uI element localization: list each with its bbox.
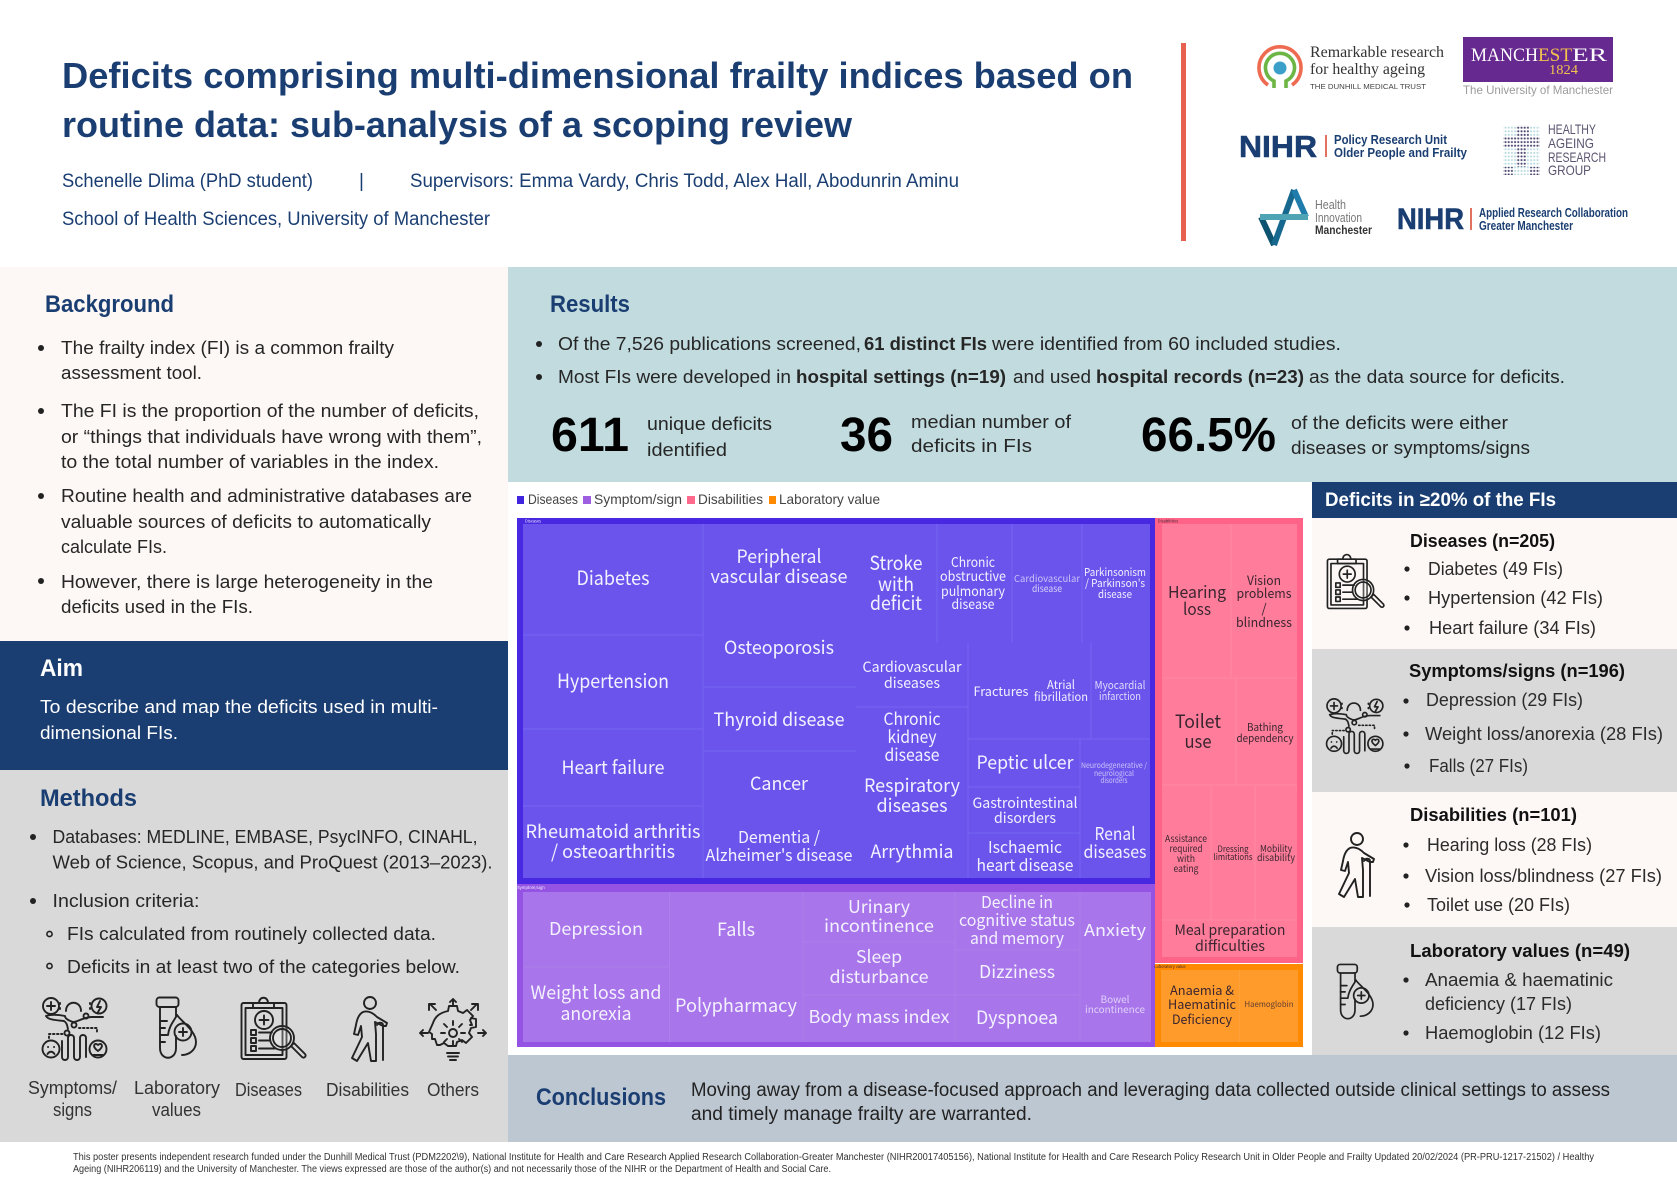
- treemap group: laboratory value: Haematinic: [1168, 994, 1236, 1013]
- treemap group: disabilities: with: [1177, 851, 1195, 865]
- treemap group: symptom/sign: anorexia: [560, 1000, 632, 1026]
- results bullet 1: Of the 7,526 publications screened,: [558, 333, 861, 354]
- treemap group: diseases: Cardiovascular: [1014, 571, 1080, 585]
- stat: 611 unique deficits: 611: [551, 409, 629, 462]
- background bullet points: [38, 337, 482, 617]
- treemap group: symptom/sign: Body mass index: [808, 1004, 950, 1029]
- icon labels: Laboratory: [134, 1077, 221, 1098]
- treemap group: diseases: Atrial: [1047, 676, 1075, 693]
- treemap group: disabilities: Hearing: [1168, 579, 1227, 603]
- logo: Dunhill Medical Trust: [1259, 44, 1444, 91]
- treemap group: diseases: fibrillation: [1034, 688, 1088, 705]
- icon: disabilities: [352, 997, 387, 1061]
- stat: 611 unique deficits: identified: [647, 439, 727, 460]
- treemap group: symptom/sign: Decline in: [981, 889, 1053, 913]
- treemap chart: [517, 518, 1303, 1047]
- heading: conclusions: Conclusions: [536, 1084, 666, 1111]
- category: disabilities: Hearing loss (28 FIs): [1427, 834, 1592, 855]
- category: symptoms/signs: Depression (29 FIs): [1426, 689, 1583, 710]
- category: symptoms/signs: Weight loss/anorexia (28 FIs): [1425, 723, 1663, 744]
- logo: University of Manchester: ER: [1572, 45, 1607, 66]
- footer: funding statement: [73, 1152, 1594, 1175]
- treemap group: diseases: Fractures: [974, 681, 1028, 700]
- treemap group: diseases: disease: [884, 741, 940, 766]
- logo: University of Manchester: 1824: [1549, 63, 1578, 78]
- results bullet 2: hospital records (n=23): [1096, 366, 1304, 387]
- treemap group: disabilities: use: [1184, 728, 1212, 754]
- logo: University of Manchester: The University of Manchester: [1463, 83, 1613, 97]
- treemap group: diseases: / osteoarthritis: [551, 838, 675, 864]
- category: disabilities: Toilet use (20 FIs): [1427, 894, 1570, 915]
- treemap legend: Laboratory value: [779, 491, 880, 507]
- treemap group: diseases: Stroke: [870, 547, 922, 576]
- treemap group: diseases: heart disease: [976, 852, 1074, 876]
- treemap group: diseases: Respiratory: [864, 772, 960, 798]
- category: disabilities: Vision loss/blindness (27 FIs): [1425, 865, 1662, 886]
- logo: NIHR Applied Research Collaboration: Applied Research Collaboration: [1479, 206, 1628, 220]
- conclusions text: [691, 1080, 1610, 1125]
- category: diseases: [1312, 518, 1677, 649]
- treemap group: symptom/sign: Bowel: [1100, 991, 1130, 1006]
- authors: Supervisors: Emma Vardy, Chris Todd, Alex Hall, Abodunrin Aminu: [410, 171, 959, 192]
- treemap group: symptom/sign: and memory: [970, 925, 1064, 949]
- background bullet points: Routine health and administrative databases are: [61, 485, 472, 506]
- treemap group: symptom/sign: Dizziness: [979, 959, 1055, 984]
- background bullet points: assessment tool.: [61, 362, 202, 383]
- treemap group: diseases: diseases: [884, 672, 940, 693]
- treemap group: laboratory value: Haemoglobin: [1244, 999, 1294, 1010]
- treemap group: symptom/sign: incontinence: [1085, 1001, 1145, 1016]
- treemap group: disabilities: Meal preparation: [1174, 919, 1286, 940]
- methods bullet list: [30, 826, 492, 977]
- footer: funding statement: Ageing (NIHR206119) and the University of Manchester. The views expressed are those of the author(s) and not necessarily those of the NIHR or the Department of Health and Social Care.: [73, 1164, 831, 1175]
- background bullet points: or “things that individuals have wrong with them”,: [61, 426, 482, 447]
- icon labels: Symptoms/: [28, 1077, 118, 1098]
- treemap group: disabilities: Mobility: [1260, 841, 1292, 855]
- treemap group: laboratory value: [1154, 964, 1303, 1047]
- treemap group: diseases: Chronic: [884, 705, 941, 730]
- treemap group: diseases: neurological: [1094, 768, 1134, 779]
- treemap group: symptom/sign: Anxiety: [1084, 917, 1146, 941]
- logo: NIHR Policy Research Unit: NIHR: [1239, 129, 1317, 164]
- stat: 66.5% diseases or symptoms: 66.5%: [1141, 409, 1276, 462]
- results bullet 1: were identified from 60 included studies.: [991, 333, 1341, 354]
- results bullet 2: hospital settings (n=19): [796, 366, 1006, 387]
- treemap group: laboratory value: Anaemia &: [1170, 980, 1234, 999]
- heading: results: Results: [550, 291, 630, 318]
- aim text: To describe and map the deficits used in multi-: [40, 696, 438, 717]
- treemap group: disabilities: /: [1261, 598, 1267, 617]
- panel: results: [508, 267, 1677, 482]
- treemap group: symptom/sign: Depression: [549, 916, 643, 941]
- treemap group: diseases: Alzheimer's disease: [706, 842, 852, 866]
- treemap group: diseases: Peptic ulcer: [976, 749, 1074, 775]
- category: laboratory values: Anaemia & haematinic: [1425, 969, 1613, 990]
- treemap group: diseases: kidney: [888, 723, 937, 748]
- treemap group: diseases: disorders: [994, 807, 1056, 828]
- conclusions text: and timely manage frailty are warranted.: [691, 1104, 1032, 1125]
- icon: symptoms/signs: [42, 998, 106, 1060]
- icon labels: Disabilities: [326, 1079, 409, 1100]
- results bullet 2: and used: [1013, 366, 1091, 387]
- panel heading: Deficits in ≥20% of the FIs: [1325, 490, 1556, 511]
- stat: 36 median deficits: [840, 409, 1072, 462]
- panel: background: [0, 267, 508, 641]
- treemap group: disabilities: dependency: [1236, 731, 1294, 746]
- background bullet points: deficits used in the FIs.: [61, 596, 253, 617]
- title: routine data: sub-analysis of a scoping review: [62, 104, 853, 145]
- treemap group: diseases: deficit: [870, 587, 923, 616]
- results bullet 2: as the data source for deficits.: [1309, 366, 1565, 387]
- treemap group: diseases: Diabetes: [576, 562, 650, 591]
- treemap group: diseases: disease: [1032, 581, 1062, 595]
- results bullet 2: Most FIs were developed in: [558, 366, 791, 387]
- treemap group: diseases: disease: [952, 593, 994, 613]
- aim text: [40, 696, 438, 743]
- logo: NIHR Policy Research Unit: Older People and Frailty: [1334, 145, 1468, 160]
- treemap group: diseases: diseases: [1084, 839, 1146, 864]
- logo: Health Innovation Manchester: [1260, 190, 1372, 245]
- treemap group: symptom/sign: cognitive status: [959, 907, 1075, 931]
- logo: Healthy Ageing Research Group: RESEARCH: [1548, 149, 1606, 165]
- logo: University of Manchester: EST: [1538, 45, 1572, 66]
- treemap group: diseases: vascular disease: [710, 563, 848, 589]
- logo: NIHR Applied Research Collaboration: Greater Manchester: [1479, 219, 1573, 233]
- treemap group: diseases: Rheumatoid arthritis: [526, 818, 700, 844]
- logo: NIHR Policy Research Unit: [1239, 129, 1468, 164]
- treemap group: diseases: / Parkinson's: [1085, 575, 1145, 591]
- treemap group: symptom/sign: Urinary: [848, 894, 910, 919]
- methods bullet list: Deficits in at least two of the categories below.: [67, 956, 460, 977]
- logo: NIHR Policy Research Unit: Policy Research Unit: [1334, 132, 1448, 147]
- treemap group: disabilities: Assistance: [1165, 831, 1207, 845]
- stat: 66.5% diseases or symptoms: diseases or symptoms/signs: [1291, 437, 1530, 458]
- treemap group: disabilities: loss: [1183, 596, 1211, 620]
- stat: 66.5% diseases or symptoms: of the deficits were either: [1291, 412, 1508, 433]
- treemap group: diseases: Diseases: [525, 518, 541, 524]
- icon: others: [420, 999, 486, 1060]
- treemap group: diseases: Dementia /: [738, 824, 820, 848]
- red divider: [1181, 43, 1186, 241]
- background bullet points: The FI is the proportion of the number of deficits,: [61, 400, 479, 421]
- treemap group: diseases: Osteoporosis: [724, 634, 834, 660]
- category: laboratory values: deficiency (17 FIs): [1425, 993, 1572, 1014]
- treemap group: disabilities: limitations: [1214, 851, 1253, 863]
- logo: Health Innovation Manchester: Health: [1315, 198, 1346, 212]
- treemap group: disabilities: blindness: [1236, 612, 1292, 631]
- treemap group: disabilities: Disabilities: [1158, 518, 1178, 524]
- category: laboratory values: [1312, 927, 1677, 1055]
- treemap group: diseases: pulmonary: [941, 580, 1005, 600]
- icon labels: Diseases: [235, 1079, 302, 1100]
- category: diseases: Heart failure (34 FIs): [1429, 617, 1596, 638]
- treemap group: symptom/sign: incontinence: [824, 913, 934, 938]
- category: diseases: Hypertension (42 FIs): [1428, 587, 1603, 608]
- treemap group: diseases: Hypertension: [557, 665, 669, 694]
- logo: Healthy Ageing Research Group: AGEING: [1548, 135, 1594, 151]
- treemap group: diseases: Cancer: [750, 770, 809, 796]
- treemap group: diseases: Parkinsonism: [1084, 564, 1146, 580]
- methods bullet list: Web of Science, Scopus, and ProQuest (2013–2023).: [52, 852, 492, 872]
- stat: 66.5% diseases or symptoms: [1141, 409, 1530, 462]
- panel: deficits in at least 20% of the FIs: [1312, 482, 1677, 1055]
- treemap group: symptom/sign: Sleep: [856, 944, 902, 969]
- category: symptoms/signs: Falls (27 FIs): [1429, 755, 1528, 776]
- stat: 36 median deficits: 36: [840, 409, 893, 462]
- icon labels: [28, 1077, 479, 1120]
- category: diseases: Diseases (n=205): [1410, 531, 1555, 551]
- panel: conclusions: [508, 1055, 1677, 1142]
- treemap group: symptom/sign: Weight loss and: [530, 979, 662, 1005]
- treemap group: disabilities: difficulties: [1195, 935, 1265, 956]
- treemap group: diseases: [517, 518, 1155, 884]
- treemap group: diseases: disease: [1098, 586, 1132, 602]
- logo: Health Innovation Manchester: Manchester: [1315, 223, 1372, 237]
- heading: aim: Aim: [40, 655, 83, 682]
- treemap group: diseases: Myocardial: [1094, 677, 1146, 693]
- treemap group: disabilities: Vision: [1247, 570, 1281, 589]
- results bullet 1: 61 distinct FIs: [864, 333, 987, 354]
- treemap legend: Symptom/sign: [594, 491, 682, 507]
- icon labels: signs: [53, 1099, 92, 1120]
- treemap legend: Diseases: [528, 491, 578, 507]
- treemap group: diseases: Thyroid disease: [714, 706, 844, 732]
- logo: Healthy Ageing Research Group: [1503, 121, 1606, 178]
- treemap group: diseases: Renal: [1094, 821, 1136, 846]
- treemap group: laboratory value: Deficiency: [1172, 1009, 1232, 1028]
- category: laboratory values: Haemoglobin (12 FIs): [1425, 1022, 1601, 1043]
- treemap group: diseases: Peripheral: [736, 543, 822, 569]
- background bullet points: valuable sources of deficits to automatically: [61, 511, 432, 532]
- methods bullet list: FIs calculated from routinely collected data.: [67, 923, 436, 944]
- conclusions text: Moving away from a disease-focused approach and leveraging data collected outside clinical settings to assess: [691, 1080, 1610, 1101]
- background bullet points: However, there is large heterogeneity in the: [61, 571, 433, 592]
- panel: aim: [0, 641, 508, 770]
- treemap group: laboratory value: Laboratory value: [1154, 964, 1187, 970]
- logo: Dunhill Medical Trust: for healthy ageing: [1310, 61, 1425, 78]
- logo: University of Manchester: [1463, 37, 1613, 97]
- treemap group: disabilities: Dressing: [1218, 843, 1249, 855]
- footer: funding statement: This poster presents independent research funded under the Dunhill Medical Trust (PDM2202\9), National Institute for Health and Care Research Applied Research Collaboration-Greater Manchester (NIHR20017405156), National Institute for Health and Care Research Policy Research Unit in Older People and Frailty Updated 20/02/2024 (PR-PRU-1217-21502) / Healthy: [73, 1152, 1594, 1163]
- logo: Healthy Ageing Research Group: HEALTHY: [1548, 121, 1596, 137]
- treemap group: disabilities: disability: [1257, 850, 1295, 864]
- treemap group: disabilities: [1155, 518, 1303, 963]
- treemap group: symptom/sign: Polypharmacy: [675, 992, 797, 1018]
- background bullet points: The frailty index (FI) is a common frailty: [61, 337, 395, 358]
- treemap group: disabilities: eating: [1174, 861, 1199, 875]
- authors: |: [359, 171, 364, 192]
- treemap group: diseases: Ischaemic: [988, 834, 1062, 858]
- logo: NIHR Applied Research Collaboration: NIHR: [1397, 203, 1464, 236]
- category: laboratory values: Laboratory values (n=49): [1410, 941, 1630, 961]
- treemap group: diseases: Neurodegenerative /: [1081, 760, 1147, 771]
- logo: Health Innovation Manchester: Innovation: [1315, 211, 1362, 225]
- panel heading: [1312, 482, 1677, 518]
- logo: Dunhill Medical Trust: Remarkable research: [1310, 44, 1444, 61]
- treemap group: disabilities: required: [1170, 841, 1203, 855]
- treemap group: symptom/sign: Dyspnoea: [976, 1004, 1058, 1030]
- treemap group: diseases: Arrythmia: [870, 838, 954, 864]
- stat: 36 median deficits: deficits in FIs: [911, 435, 1032, 456]
- panel: methods: [0, 770, 508, 1142]
- results bullet 1: [536, 333, 1341, 354]
- treemap group: diseases: Heart failure: [562, 754, 664, 780]
- aim text: dimensional FIs.: [40, 722, 178, 743]
- stat: 611 unique deficits: unique deficits: [647, 413, 772, 434]
- treemap group: diseases: Cardiovascular: [862, 656, 962, 677]
- category: symptoms/signs: [1312, 649, 1677, 792]
- icon: laboratory values: [156, 998, 196, 1058]
- heading: methods: Methods: [40, 785, 137, 812]
- treemap legend: Disabilities: [698, 491, 763, 507]
- treemap group: diseases: obstructive: [940, 565, 1006, 585]
- treemap group: diseases: Gastrointestinal: [972, 792, 1078, 813]
- treemap group: disabilities: Toilet: [1175, 708, 1221, 734]
- treemap group: diseases: diseases: [876, 792, 948, 818]
- logo: NIHR Applied Research Collaboration: [1397, 203, 1628, 236]
- logo: University of Manchester: MANCH: [1471, 45, 1538, 66]
- treemap group: diseases: Chronic: [951, 551, 995, 571]
- treemap group: symptom/sign: Symptom/sign: [517, 885, 545, 891]
- authors: Schenelle Dlima (PhD student): [62, 171, 313, 192]
- treemap group: disabilities: problems: [1236, 583, 1292, 602]
- background bullet points: calculate FIs.: [61, 536, 167, 557]
- logo: Dunhill Medical Trust: THE DUNHILL MEDICAL TRUST: [1310, 82, 1426, 91]
- icon labels: Others: [427, 1079, 479, 1100]
- stat: 36 median deficits: median number of: [911, 411, 1072, 432]
- treemap group: symptom/sign: disturbance: [830, 964, 928, 989]
- results bullet 2: [536, 366, 1565, 387]
- title: Deficits comprising multi-dimensional frailty indices based on: [62, 55, 1133, 96]
- category: disabilities: [1312, 792, 1677, 927]
- treemap group: diseases: with: [878, 568, 914, 597]
- icon labels: values: [152, 1099, 201, 1120]
- background bullet points: to the total number of variables in the index.: [61, 451, 439, 472]
- stat: 611 unique deficits: [551, 409, 772, 462]
- category: diseases: Diabetes (49 FIs): [1428, 558, 1563, 579]
- category: symptoms/signs: Symptoms/signs (n=196): [1409, 661, 1625, 681]
- authors: [62, 171, 959, 192]
- methods bullet list: Databases: MEDLINE, EMBASE, PsycINFO, CINAHL,: [52, 826, 478, 847]
- affiliation: School of Health Sciences, University of Manchester: [62, 209, 491, 230]
- methods bullet list: Inclusion criteria:: [52, 890, 200, 911]
- treemap group: disabilities: Bathing: [1247, 720, 1283, 735]
- category: disabilities: Disabilities (n=101): [1410, 805, 1577, 825]
- icon: diseases: [242, 998, 306, 1059]
- title: [62, 55, 1133, 145]
- header: [62, 37, 1628, 245]
- treemap group: symptom/sign: Falls: [717, 916, 755, 942]
- heading: background: Background: [45, 291, 174, 318]
- treemap legend: [517, 491, 880, 507]
- treemap group: symptom/sign: [517, 884, 1155, 1047]
- treemap group: diseases: disorders: [1100, 775, 1128, 786]
- logo: Healthy Ageing Research Group: GROUP: [1548, 162, 1591, 178]
- treemap group: diseases: infarction: [1099, 688, 1141, 704]
